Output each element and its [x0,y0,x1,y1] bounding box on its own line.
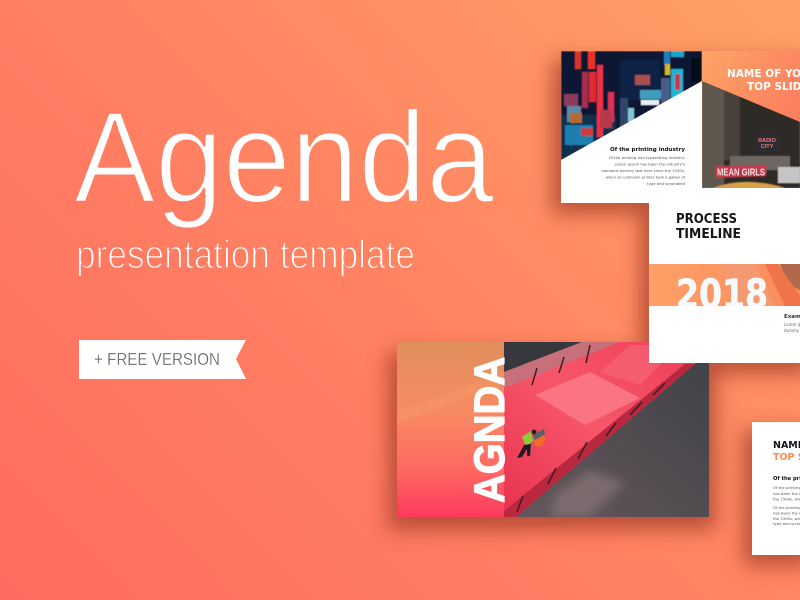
slide: agnda [397,342,709,517]
slide text: Of the printing and typesetting industry. [609,155,685,160]
slide: name of your top slide bottom [752,422,800,555]
slide text [602,147,686,186]
heading: PROCESS [676,212,737,227]
bridge photo [504,342,709,517]
heading [676,212,741,242]
slide: agnda: AGNDA [466,357,514,503]
ribbon badge [79,340,246,379]
slide text: type and scrambled [647,181,686,186]
example text [784,314,800,333]
slide: process timeline [649,188,800,363]
title: Agenda [74,84,495,230]
street photo [702,81,800,188]
icon: worker with cart [517,429,545,458]
street photo: CITY [761,144,774,150]
ribbon badge: + FREE VERSION [94,349,220,369]
slide text: standard dummy text ever since the 1500s, [602,168,685,173]
slide: of the printing industry [561,51,702,203]
text block [773,476,800,526]
orange band: 2018 [676,272,768,318]
slide: name of your top slide [702,51,800,188]
orange band [649,264,800,306]
slide text: Of the printing industry [610,147,685,153]
subtitle: presentation template [76,233,415,277]
street photo: MEAN GIRLS [717,168,765,178]
shadows [388,60,800,566]
slide text: when an unknown printer took a galley of [606,174,686,180]
slide: name of your top slide: TOP SLID [747,81,800,93]
slide: name of your top slide: NAME OF YO [727,68,800,80]
heading [773,440,800,463]
heading: TIMELINE [676,227,741,242]
street photo: RADIO [758,138,777,144]
slide text: Lorem Ipsum has been the industry's [614,162,685,166]
city night photo [561,51,702,161]
